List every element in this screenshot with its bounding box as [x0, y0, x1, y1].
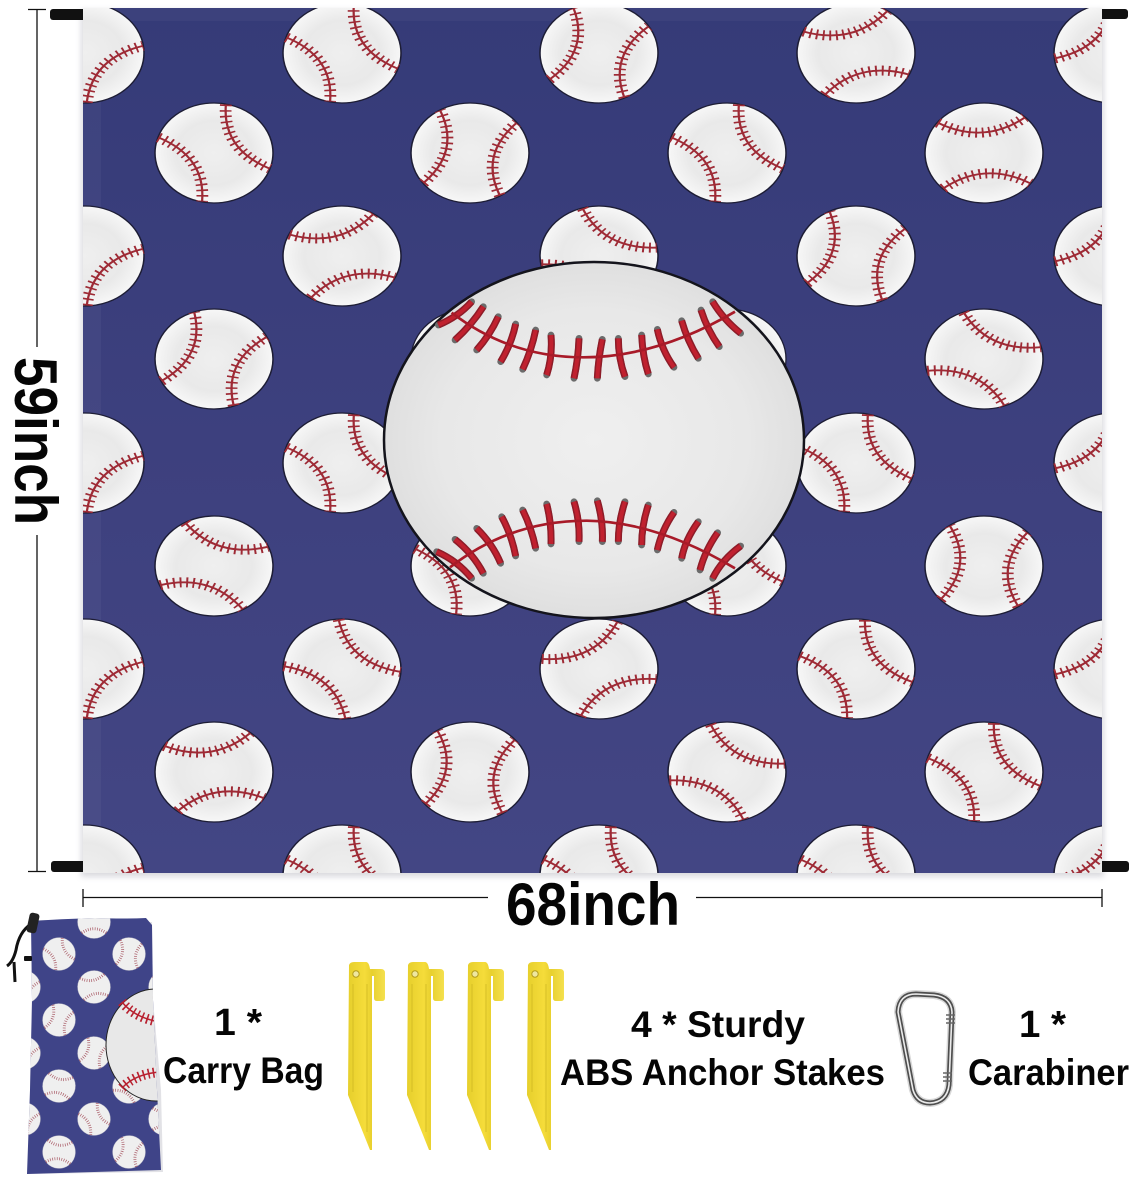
carabiner label [968, 1004, 1129, 1093]
corner loop: top left [50, 9, 86, 20]
icon: anchor stake 4 [527, 962, 564, 1150]
pattern row 5 [2, 392, 1136, 534]
icon: carry bag [6, 912, 163, 1174]
carry bag label: Carry Bag [163, 1050, 324, 1091]
pattern row 2 [154, 102, 1044, 204]
carabiner label: Carabiner [968, 1052, 1129, 1093]
corner loop: bottom right [1098, 861, 1129, 872]
bag body with pattern [27, 918, 161, 1174]
pattern row 3 [83, 205, 1102, 307]
blanket panel with baseball pattern [83, 8, 1102, 873]
bottom seam stitches [437, 501, 741, 578]
pattern row 1 [83, 8, 1102, 104]
stakes label: ABS Anchor Stakes [560, 1052, 885, 1093]
large central baseball [384, 262, 804, 618]
bag large baseball [106, 988, 158, 1102]
top seam stitches [438, 302, 741, 378]
pattern row 7 [83, 618, 1102, 720]
pattern row 9 [83, 824, 1102, 873]
pattern row 4 [154, 308, 1044, 410]
corner loop: bottom left [51, 861, 87, 872]
carry bag label [163, 1002, 324, 1091]
stakes label [560, 1004, 885, 1093]
width dimension line [83, 889, 1102, 907]
stakes label: 4 * Sturdy [631, 1004, 805, 1045]
icon: anchor stake 2 [407, 962, 444, 1150]
height label: 59inch [2, 357, 69, 525]
icon: anchor stake 3 [467, 962, 504, 1150]
carry bag label: 1 * [214, 1002, 262, 1044]
carabiner label: 1 * [1019, 1004, 1066, 1046]
pattern row 8 [154, 721, 1044, 823]
icon: anchor stake 1 [348, 962, 385, 1150]
bag cord and toggle [7, 912, 40, 982]
corner loop: top right [1098, 9, 1128, 19]
width label: 68inch [506, 871, 680, 938]
icon: carabiner [898, 994, 955, 1103]
pattern row 6 [154, 515, 1044, 617]
blanket panel shadow [81, 10, 1104, 877]
height dimension line [28, 10, 46, 872]
